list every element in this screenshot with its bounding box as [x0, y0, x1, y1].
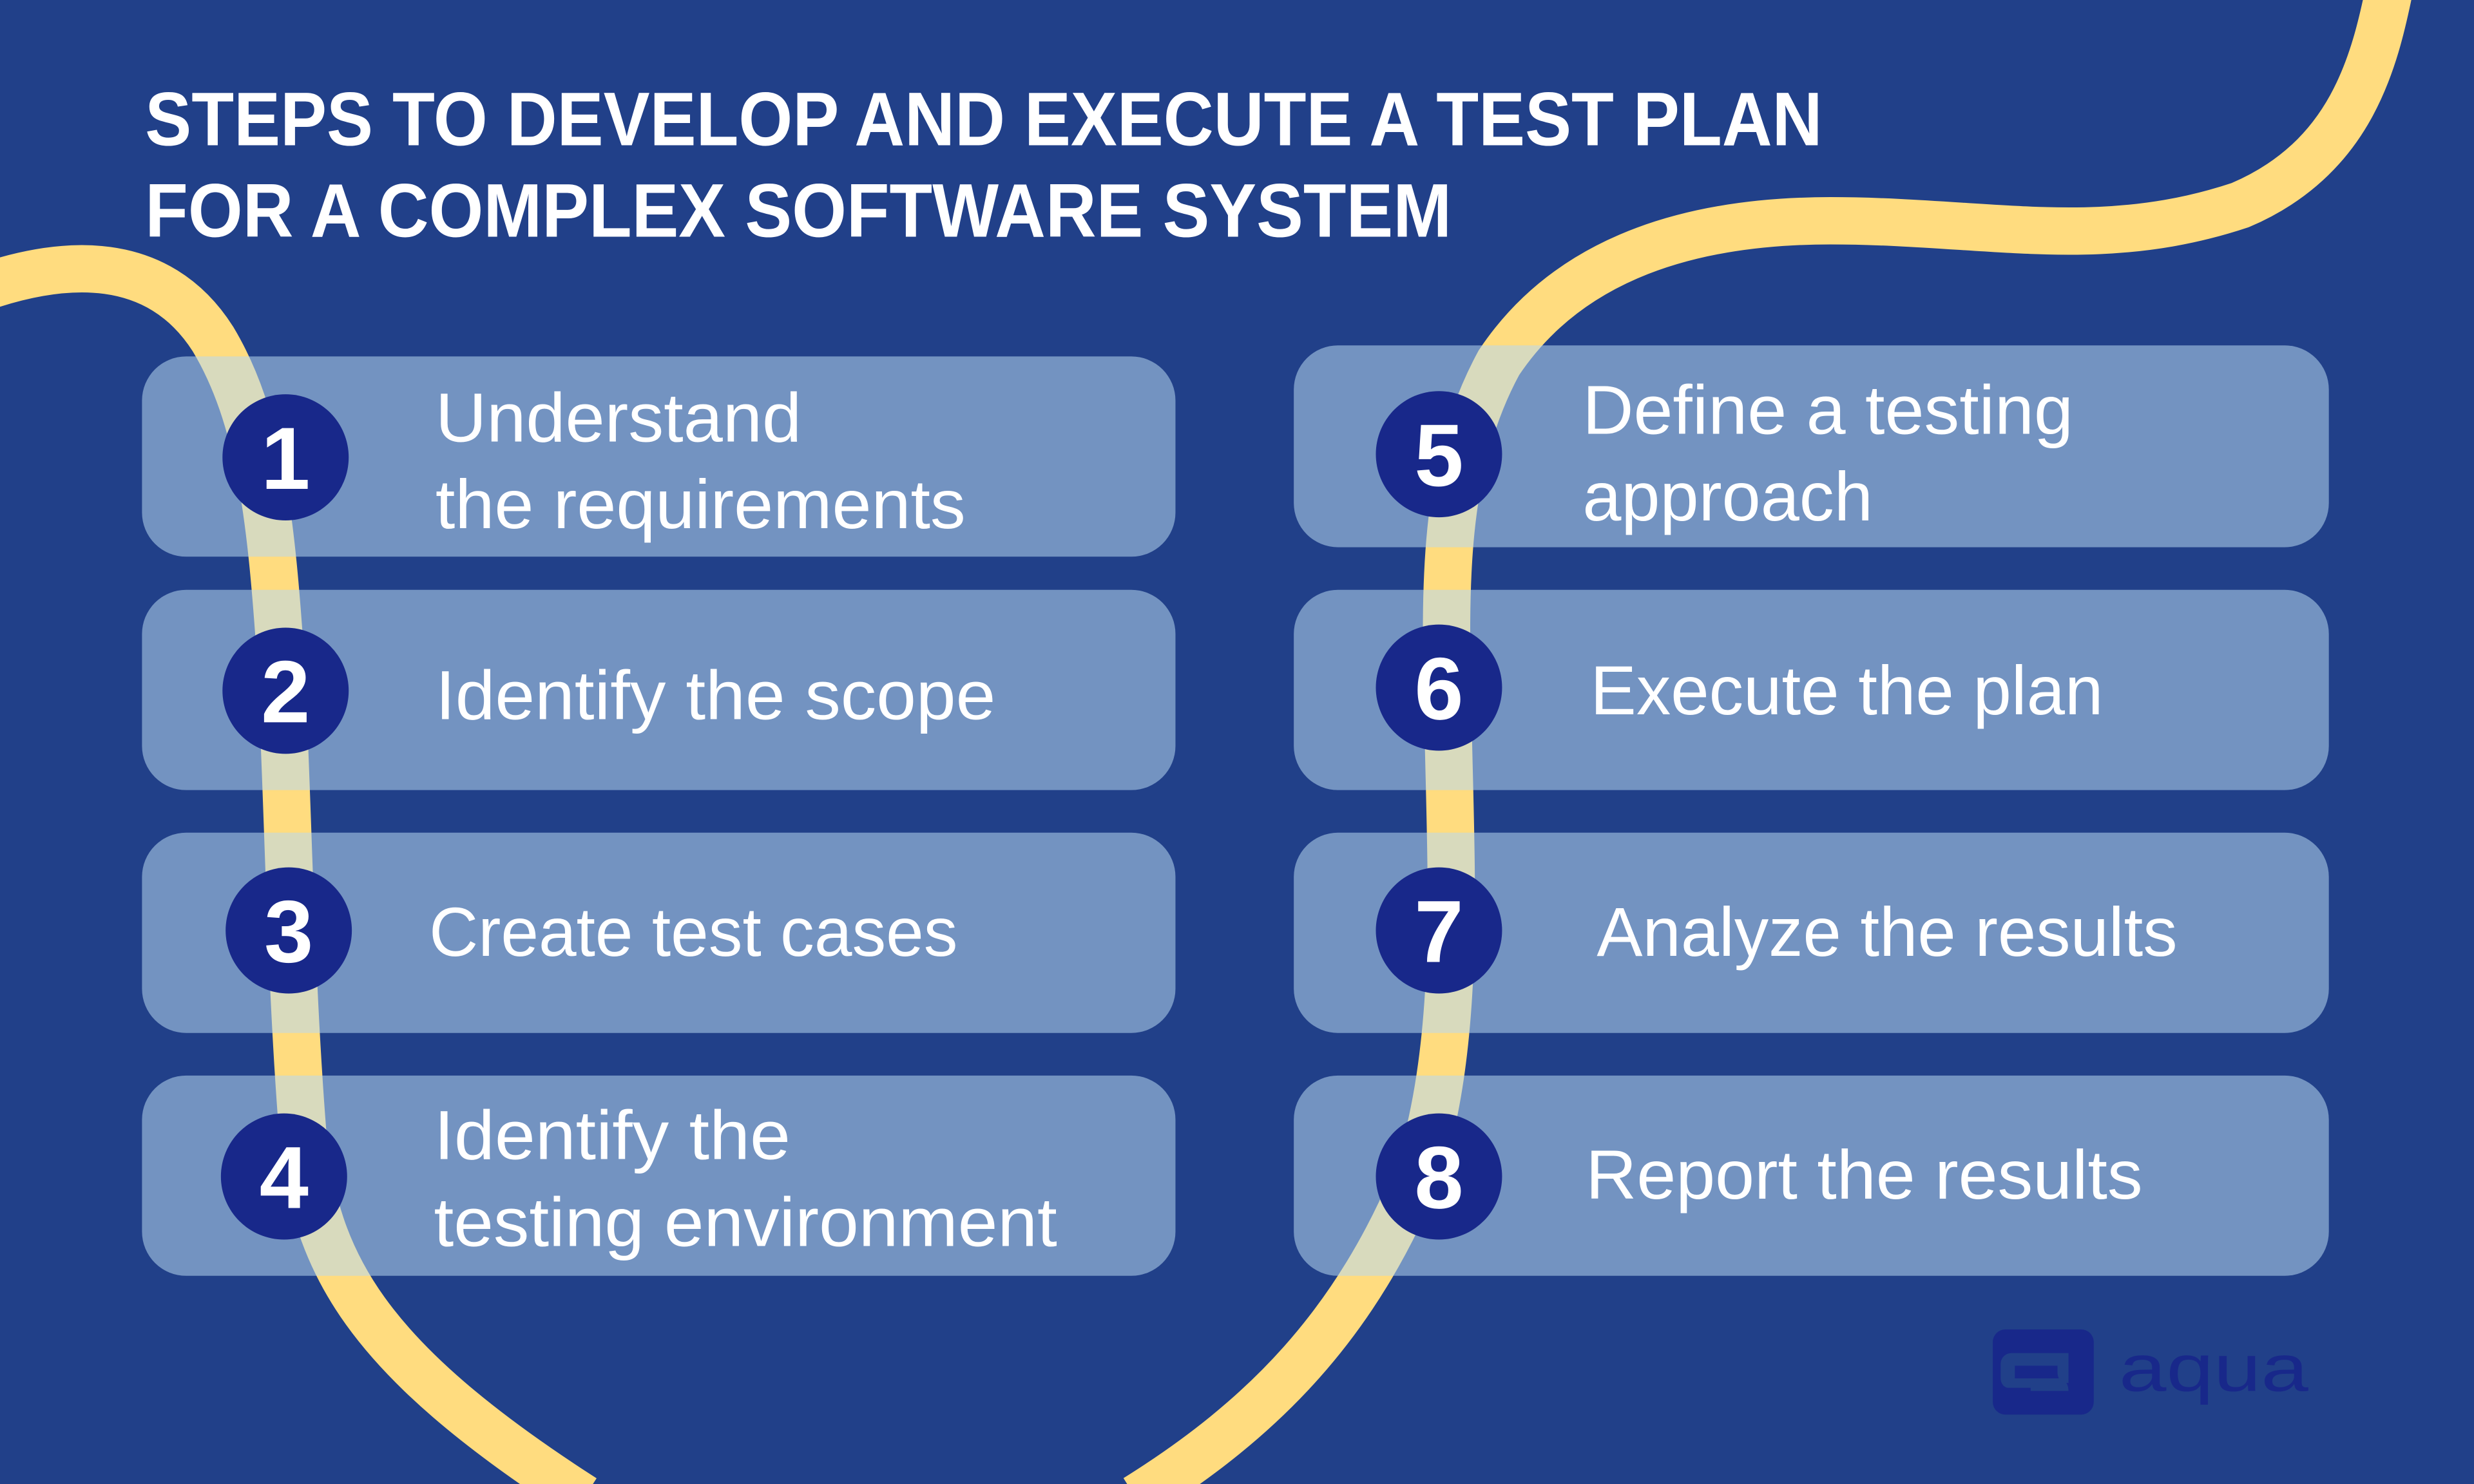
panel: step 8: Report the results [1586, 1136, 2143, 1213]
logo: aqua: aqua [2119, 1331, 2309, 1405]
panel: step 5: 5 [1414, 406, 1464, 505]
title: FOR A COMPLEX SOFTWARE SYSTEM [145, 168, 1452, 252]
title [145, 77, 1823, 252]
panel: step 5 [1294, 345, 2329, 547]
panel: step 1 [142, 356, 1175, 556]
panel: step 8: 8 [1414, 1129, 1464, 1228]
panel: step 3: Create test cases [429, 893, 958, 971]
logo: aqua [1993, 1329, 2309, 1414]
panel: step 8 [1294, 1076, 2329, 1276]
panel: step 7 [1294, 833, 2329, 1033]
panel: step 1: Understand [436, 379, 801, 457]
panel: step 5: approach [1582, 457, 1873, 535]
panel: step 5: Define a testing [1582, 370, 2073, 448]
panel: step 4: Identify the [434, 1096, 791, 1174]
panel: step 4: testing environment [434, 1183, 1057, 1260]
title: STEPS TO DEVELOP AND EXECUTE A TEST PLAN [145, 77, 1823, 161]
panel: step 2 [142, 590, 1175, 790]
panel: step 6: Execute the plan [1591, 651, 2103, 729]
yellow path: right [1136, 0, 2390, 1484]
panel: step 2: 2 [261, 643, 310, 741]
panel: step 7: Analyze the results [1597, 893, 2178, 971]
panel: step 1: the requirements [436, 465, 966, 543]
panel: step 3 [142, 833, 1175, 1033]
panel: step 1: 1 [261, 410, 310, 508]
panel: step 2: Identify the scope [436, 656, 995, 734]
panel: step 4 [142, 1076, 1175, 1276]
panel: step 4: 4 [260, 1129, 309, 1228]
panel: step 6 [1294, 590, 2329, 790]
panel: step 7: 7 [1414, 883, 1464, 982]
yellow path: left [0, 269, 584, 1484]
panel: step 6: 6 [1414, 640, 1464, 738]
panel: step 3: 3 [264, 883, 313, 982]
